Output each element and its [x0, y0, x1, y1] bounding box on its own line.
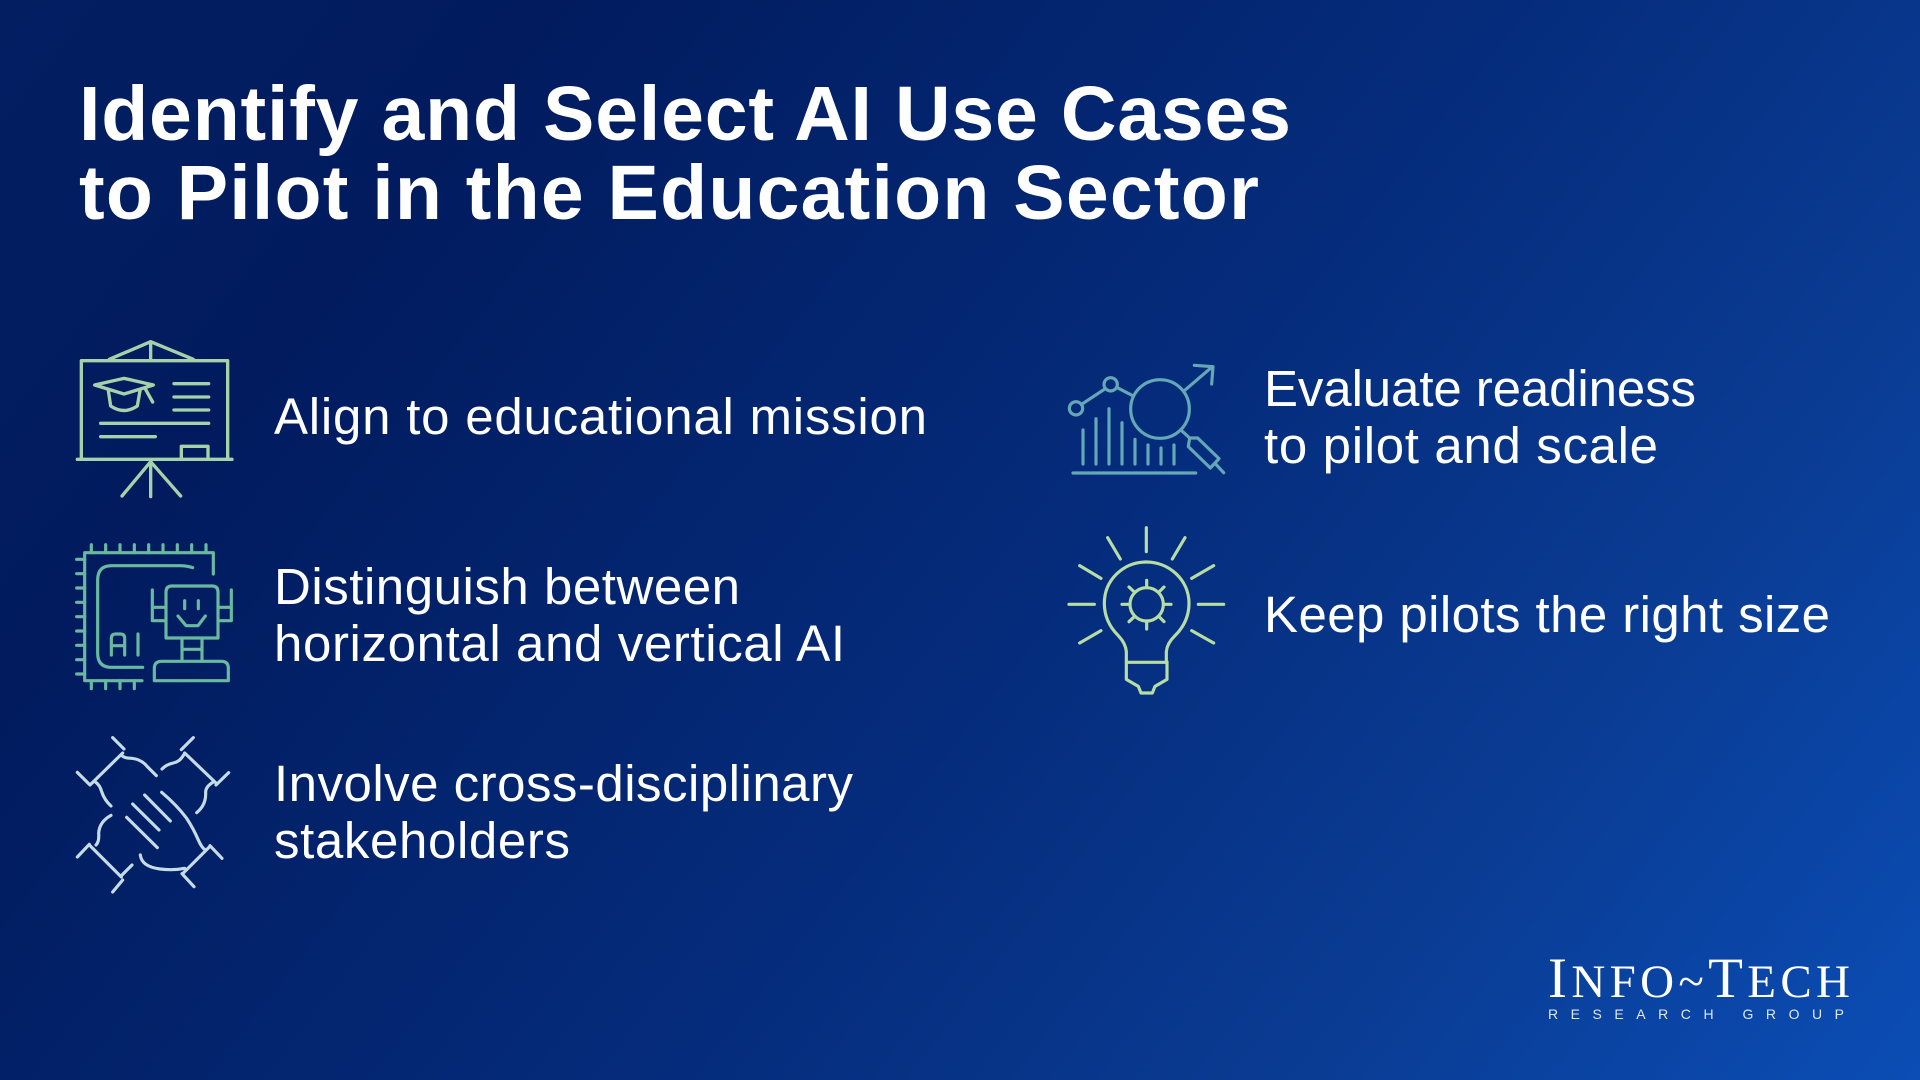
title: Identify and Select AI Use Cases [79, 71, 1291, 157]
icon: presentation board with graduation cap [77, 342, 232, 497]
text: evaluate readiness: to pilot and scale [1264, 417, 1658, 474]
text: evaluate readiness [1264, 360, 1696, 474]
text: cross-disciplinary stakeholders [274, 755, 854, 869]
icon: chart and magnifier [1069, 365, 1224, 473]
icon: joined hands [77, 738, 229, 892]
title [79, 71, 1291, 236]
text: cross-disciplinary stakeholders: stakeholders [274, 812, 570, 869]
logo: Info-Tech Research Group: RESEARCH GROUP [1548, 1006, 1844, 1022]
text: cross-disciplinary stakeholders: Involve cross-disciplinary [274, 755, 854, 812]
logo: Info-Tech Research Group: INFO~TECH [1548, 947, 1850, 1010]
text: right size: Keep pilots the right size [1264, 586, 1830, 643]
text: align to mission: Align to educational mission [274, 388, 927, 445]
icon: light bulb [1069, 528, 1224, 693]
title: to Pilot in the Education Sector [79, 150, 1259, 236]
text: horizontal and vertical AI: Distinguish between [274, 558, 740, 615]
text: horizontal and vertical AI [274, 558, 845, 672]
icon: AI chip and robot [77, 545, 231, 689]
text: evaluate readiness: Evaluate readiness [1264, 360, 1696, 417]
text: horizontal and vertical AI: horizontal and vertical AI [274, 615, 845, 672]
